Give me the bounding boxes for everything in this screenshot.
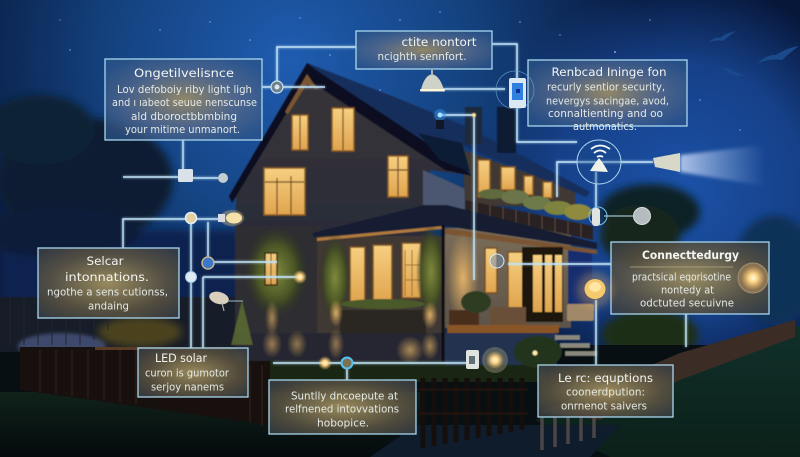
body text [546, 82, 669, 133]
body text: serjoy nanems [151, 382, 224, 394]
body text [145, 368, 230, 394]
body text: coonerdpution: [566, 386, 645, 398]
planter wall [340, 310, 426, 335]
icon: window sensor [490, 254, 504, 268]
body text: autmonatics. [573, 121, 637, 133]
heading: LED solar [155, 351, 207, 365]
body text: recurly sentior security, [547, 82, 665, 94]
panel: renewable lighting [528, 60, 687, 133]
ivy window [265, 253, 277, 285]
planter [341, 299, 425, 309]
body text [285, 390, 399, 430]
body text: practsical eqorisotine [632, 272, 731, 284]
panel: night comfort [356, 31, 492, 69]
heading: Selcar [86, 254, 124, 268]
right side wall [445, 228, 571, 328]
panel: connectivity [611, 242, 769, 314]
body text: andaing [88, 300, 129, 312]
body text: and ı ıabeot seuue nenscunse [112, 97, 257, 109]
icon: connector nodes left [186, 212, 307, 284]
lamp beam on the right [653, 145, 765, 186]
lower wall [317, 236, 445, 336]
body text: ald dboroctbbmbing [131, 111, 237, 123]
icon: silver motion sensor [634, 208, 650, 224]
right brick base [445, 333, 557, 365]
body text: connaltienting and oo [548, 108, 663, 120]
body text: Lov defoboiy riby light ligh [117, 84, 252, 96]
panel: lighting equipment [538, 365, 673, 417]
body text: nontedy at [661, 284, 714, 296]
heading: Le rc: equptions [558, 371, 653, 385]
heading: Renbcad Ininge fon [552, 65, 666, 79]
panel: refined innovations [269, 380, 416, 434]
icon: birds [708, 31, 799, 76]
back fence [0, 297, 240, 352]
connector lines [123, 44, 686, 380]
wall light spots [262, 232, 479, 364]
brick bay [423, 170, 468, 212]
icon: wifi lamp [577, 140, 621, 184]
icon: globe lamp [577, 272, 613, 308]
balcony railing [465, 200, 593, 240]
panel: outdoor lighting intelligence [105, 59, 262, 140]
body text: ngothe a sens cutionss, [47, 286, 168, 298]
icon: satellite dish [208, 290, 243, 311]
body text: ncighth sennfort. [378, 51, 466, 63]
icon: node on roof connector [271, 81, 283, 93]
balcony plants [478, 189, 592, 220]
body text: relfnened intovvations [285, 404, 399, 416]
heading: ctite nontort [402, 35, 477, 49]
body text: odctuted secuivne [640, 298, 734, 310]
body text: onrnenot saivers [561, 400, 647, 412]
body text [47, 270, 168, 312]
lower left wall [235, 226, 320, 336]
house [229, 63, 597, 368]
icon: smart device at bottom [466, 350, 479, 369]
body text: hobopice. [317, 418, 369, 430]
fences [10, 297, 795, 450]
drainpipe [442, 225, 444, 362]
sofa [567, 304, 594, 321]
heading: Ongetilvelisnce [134, 66, 234, 80]
ground and lawn [0, 297, 800, 457]
body text: intonnations. [65, 270, 149, 284]
deck and patio [447, 325, 559, 333]
body text: curon is gumotor [145, 368, 230, 380]
lower roof [313, 205, 597, 249]
upper windows [264, 108, 552, 215]
icon: orange node on bottom connector [318, 356, 332, 370]
right upper wall [463, 150, 575, 208]
icon: blue ring node [342, 358, 352, 368]
lower windows and doors [350, 243, 527, 308]
chimneys [465, 107, 482, 144]
icon: ground light [482, 347, 508, 373]
body text [632, 272, 734, 310]
small tree beside house [231, 300, 253, 345]
body text [561, 386, 647, 412]
icon: chimney light [471, 112, 477, 118]
main upper wall [236, 72, 470, 236]
main roof [307, 63, 590, 197]
gable warm trim [285, 74, 318, 114]
icon: ceiling lamp [420, 70, 445, 92]
icon: bright sun light [738, 263, 768, 293]
base brick [235, 333, 445, 361]
heading: Connecttedurgy [642, 248, 739, 262]
icon: glass bulb [218, 210, 244, 226]
background trees [0, 95, 800, 361]
steps [555, 335, 597, 356]
body text: nevergys sacingae, avod, [546, 96, 669, 108]
panel: LED solar [138, 348, 248, 397]
body text [112, 84, 257, 136]
panel: solar innovations [38, 248, 179, 318]
sky gap under porch [568, 250, 592, 305]
body text: your mitime unmanort. [125, 124, 240, 136]
icon: wall sensor [589, 207, 634, 226]
body text: Suntlly dncoepute at [291, 390, 398, 402]
icon: blue sensor on roof [434, 109, 446, 129]
ivy [244, 224, 446, 322]
icon: smart sensor device [496, 71, 534, 109]
icon: doorbell device [178, 169, 228, 183]
